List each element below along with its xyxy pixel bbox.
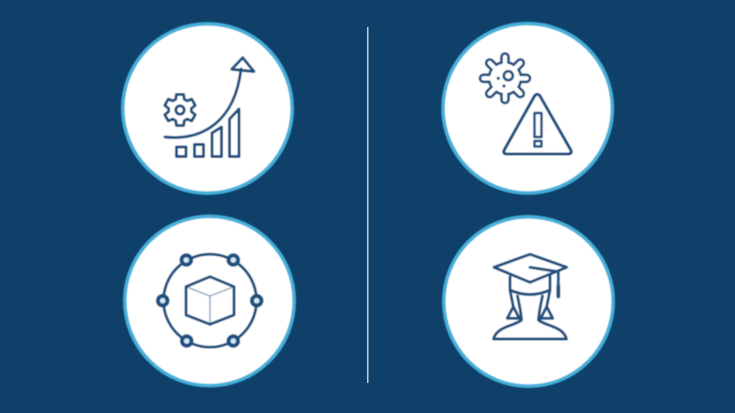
- icon: warning triangle: [504, 94, 571, 154]
- panel: graduate: [444, 217, 613, 386]
- panel: virus warning: [443, 24, 612, 193]
- icon: bar chart: [176, 109, 239, 156]
- panel: growth chart: [123, 24, 292, 193]
- icon: mortarboard cap: [494, 254, 567, 296]
- icon: rising arrow curve: [165, 58, 254, 137]
- icon: gear: [165, 94, 195, 126]
- panel: network cube: [125, 216, 294, 386]
- center divider line: [367, 27, 368, 383]
- icon: virus: [484, 57, 526, 100]
- icon: cube: [186, 277, 234, 324]
- icon: orbit ring with nodes: [158, 254, 262, 347]
- icon: graduate figure: [494, 275, 566, 339]
